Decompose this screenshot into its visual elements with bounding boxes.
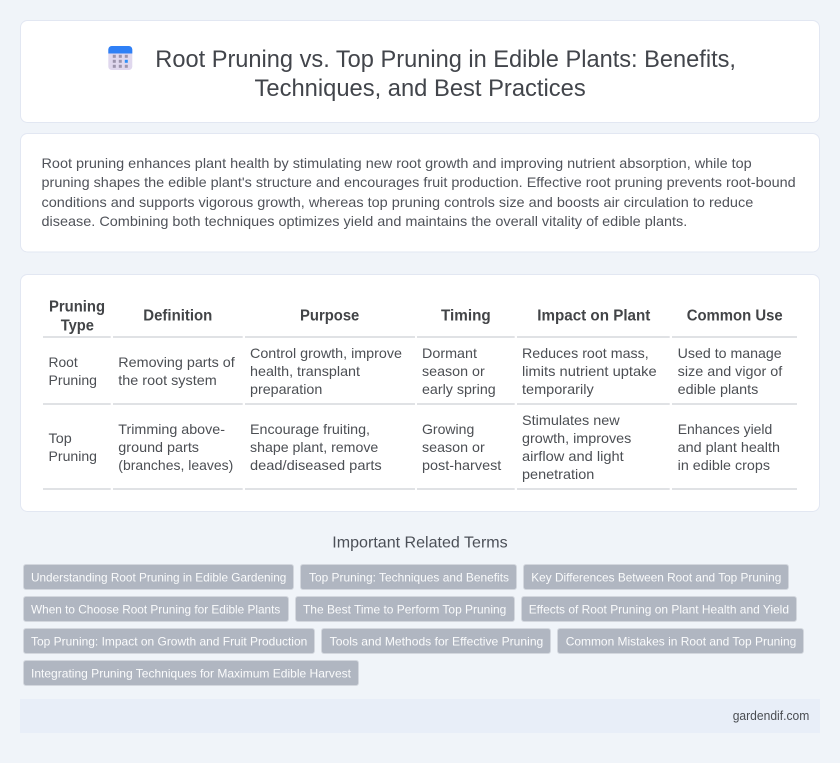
panel: introduction <box>20 134 820 252</box>
table header row: Pruning <box>49 299 105 316</box>
tag row 2: Effects of Root Pruning on Plant Health and Yield <box>529 602 789 616</box>
table row: root pruning: Pruning <box>48 372 97 388</box>
table header row: Type <box>61 318 94 335</box>
panel: comparison table <box>20 274 820 512</box>
table row: root pruning: temporarily <box>522 381 594 397</box>
table row: root pruning <box>48 345 782 397</box>
tag row 2: When to Choose Root Pruning for Edible Plants <box>31 602 280 616</box>
table row: top pruning: Top <box>48 430 72 446</box>
table row: root pruning: season or <box>422 363 485 379</box>
tag row 1: Key Differences Between Root and Top Pruning <box>531 570 781 584</box>
tag row 3: Common Mistakes in Root and Top Pruning <box>566 634 796 648</box>
table row: top pruning: airflow and light <box>522 448 624 464</box>
table row: top pruning: ground parts <box>118 439 199 455</box>
related term tags <box>24 564 804 686</box>
table row: root pruning: limits nutrient uptake <box>522 363 657 379</box>
tag row 4: Integrating Pruning Techniques for Maximum Edible Harvest <box>31 666 352 680</box>
table row: root pruning: size and vigor of <box>678 363 782 379</box>
table row: top pruning: shape plant, remove <box>250 439 379 455</box>
intro paragraph: conditions and supports vigorous growth, whereas top pruning controls size and boosts air circulation to reduce <box>42 194 754 210</box>
table header row: Timing <box>441 308 491 325</box>
tag row 1 <box>24 564 788 590</box>
footer bar <box>20 699 820 733</box>
table row: top pruning: Stimulates new <box>522 412 621 428</box>
table header row: Definition <box>143 308 212 325</box>
intro paragraph: disease. Combining both techniques optimizes yield and maintains the overall vitality of edible plants. <box>42 213 687 229</box>
tag row 4 <box>24 660 358 686</box>
table row: top pruning: Enhances yield <box>678 421 772 437</box>
header panel <box>20 20 820 122</box>
tag row 1: Understanding Root Pruning in Edible Gardening <box>31 570 286 584</box>
table row: top pruning: in edible crops <box>678 457 770 473</box>
heading: important related terms: Important Related Terms <box>332 534 508 551</box>
table row: root pruning: Root <box>48 354 78 370</box>
tag row 1: Top Pruning: Techniques and Benefits <box>309 570 509 584</box>
table row: top pruning: and plant health <box>678 439 780 455</box>
table header row: Impact on Plant <box>537 308 651 325</box>
tag row 3: Tools and Methods for Effective Pruning <box>330 634 543 648</box>
table row: root pruning: health, transplant <box>250 363 360 379</box>
intro paragraph: pruning shapes the edible plant's structure and encourages fruit production. Effective root pruning prevents root-bound <box>42 174 796 190</box>
footer bar: gardendif.com <box>733 708 809 723</box>
icon: calendar <box>108 46 132 70</box>
intro paragraph: Root pruning enhances plant health by stimulating new root growth and improving nutrient absorption, while top <box>42 155 752 171</box>
table row: top pruning: Encourage fruiting, <box>250 421 370 437</box>
table row: root pruning: early spring <box>422 381 496 397</box>
table row: root pruning: the root system <box>118 372 217 388</box>
title: Techniques, and Best Practices <box>254 75 586 102</box>
table row: root pruning: Removing parts of <box>118 354 235 370</box>
tag row 3 <box>24 628 804 654</box>
table row: root pruning: preparation <box>250 381 322 397</box>
table row: root pruning: Reduces root mass, <box>522 345 649 361</box>
table row: root pruning: Control growth, improve <box>250 345 402 361</box>
table header row: Common Use <box>687 308 783 325</box>
table row: root pruning: edible plants <box>678 381 758 397</box>
table row: top pruning: growth, improves <box>522 430 631 446</box>
table row: top pruning: post-harvest <box>422 457 501 473</box>
table header row: Purpose <box>300 308 359 325</box>
title <box>155 46 736 102</box>
table row: root pruning: Dormant <box>422 345 477 361</box>
table row: root pruning: Used to manage <box>678 345 782 361</box>
tag row 2: The Best Time to Perform Top Pruning <box>303 602 506 616</box>
table row: top pruning: Pruning <box>48 448 97 464</box>
tag row 3: Top Pruning: Impact on Growth and Fruit Production <box>31 634 307 648</box>
table row: top pruning: dead/diseased parts <box>250 457 382 473</box>
table row: top pruning <box>48 412 780 482</box>
table row: top pruning: season or <box>422 439 485 455</box>
table header row <box>49 299 783 335</box>
title: Root Pruning vs. Top Pruning in Edible Plants: Benefits, <box>155 46 736 73</box>
tag row 2 <box>24 596 796 622</box>
intro paragraph <box>42 155 796 229</box>
table row: top pruning: Trimming above- <box>118 421 225 437</box>
table row: top pruning: (branches, leaves) <box>118 457 233 473</box>
table row: top pruning: Growing <box>422 421 474 437</box>
table row: top pruning: penetration <box>522 466 594 482</box>
